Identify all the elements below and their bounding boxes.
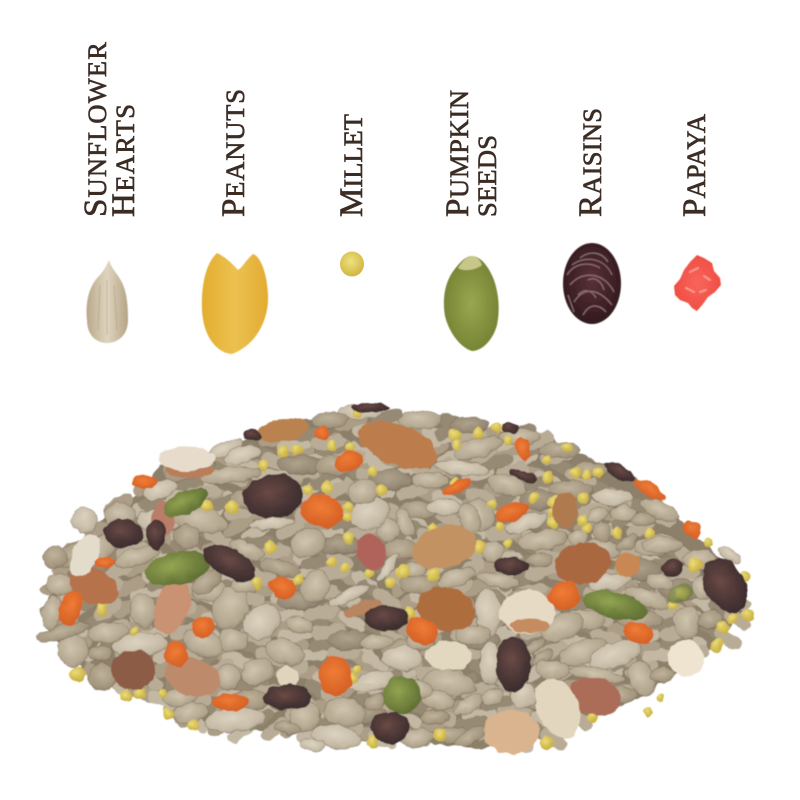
filler seeds dark tone [84, 414, 728, 735]
white peanut halves [64, 447, 704, 754]
peanuts and almonds [63, 412, 640, 722]
millet grains [70, 407, 754, 750]
filler seeds mid tone [48, 419, 692, 740]
label: Pumpkin seeds [440, 90, 502, 217]
icon: sunflower heart [87, 260, 128, 343]
filler seeds light tone [100, 423, 744, 744]
filler seeds pale tone [66, 426, 710, 747]
label: Sunflower Hearts: SUNFLOWER [78, 42, 114, 217]
pumpkin seeds [142, 482, 696, 714]
label: Papaya: PAPAYA [677, 114, 713, 217]
label: Peanuts: PEANUTS [216, 89, 252, 217]
label: Pumpkin seeds: PUMPKIN [440, 90, 476, 217]
label: Sunflower Hearts: HEARTS [106, 104, 142, 217]
icon: pumpkin seed [444, 256, 499, 351]
sunflower hearts main layer [35, 432, 743, 752]
seed pile [35, 404, 757, 754]
icon: millet [340, 252, 364, 276]
label: Pumpkin seeds: SEEDS [472, 135, 502, 217]
raisins [103, 404, 757, 744]
label: Millet: MILLET [334, 114, 370, 217]
pile base [48, 411, 744, 748]
sunflower hearts background layer [45, 405, 718, 743]
icon: raisin [563, 243, 621, 324]
label: Sunflower Hearts [78, 42, 142, 217]
icon: peanut [202, 253, 268, 354]
papaya pieces [55, 426, 705, 711]
icon: papaya [674, 255, 721, 311]
label: Raisins: RAISINS [573, 108, 609, 217]
